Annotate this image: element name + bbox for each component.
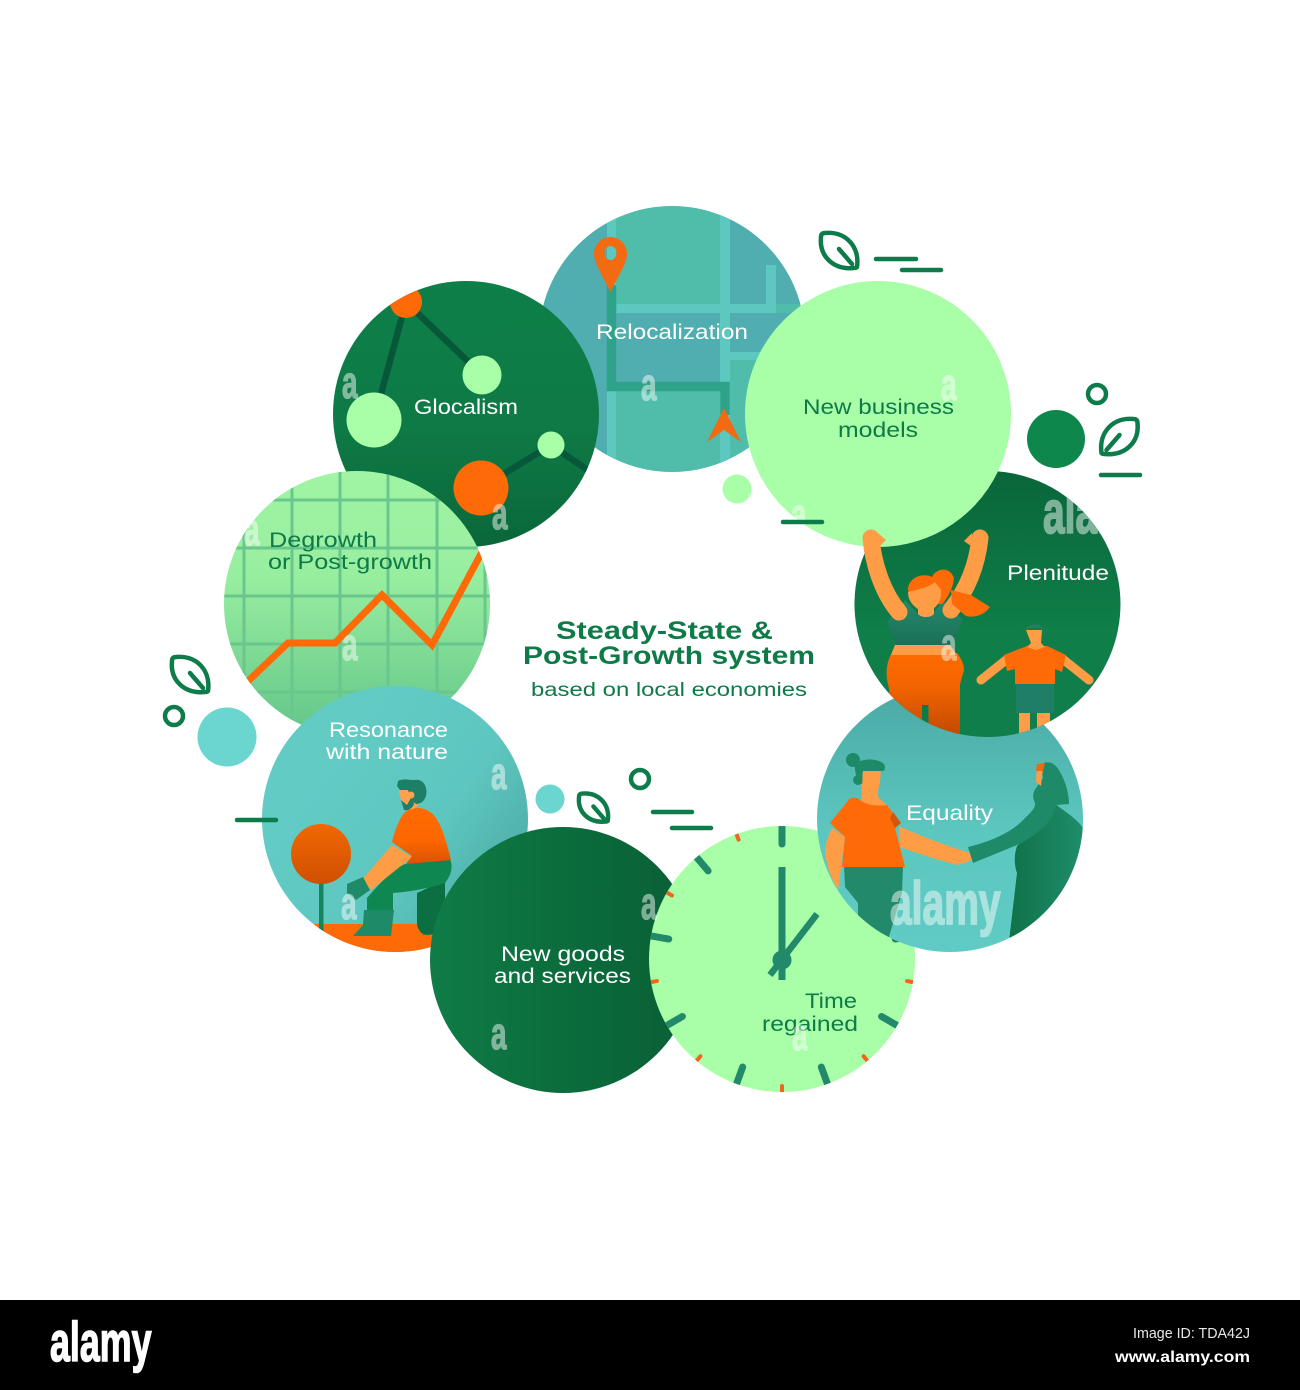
illustration: woman with raised arms [871, 533, 990, 740]
label: New business models: models [838, 419, 918, 442]
watermark letters: a [791, 489, 807, 540]
subtitle: based on local economies [531, 679, 807, 701]
icon: map pin [594, 237, 627, 292]
watermark letters: a [342, 357, 358, 408]
label: Resonance with nature: Resonance [329, 719, 448, 742]
illustration: man planting a tree [291, 779, 452, 952]
panel: Resonance with nature [262, 686, 528, 954]
label: Time regained: Time [805, 990, 857, 1013]
panel: Equality [817, 686, 1083, 952]
footer logo: alamy [50, 1310, 152, 1373]
label: New business models [803, 396, 954, 442]
watermark letters: a [641, 359, 657, 410]
illustration: child with open arms [981, 624, 1089, 745]
watermark letters: a [491, 1008, 507, 1059]
panel: Degrowth or Post-growth [220, 470, 490, 740]
panel: Glocalism [333, 281, 605, 547]
decoration: top right leaf and dashes [821, 233, 941, 270]
decoration: right circles and leaf [1027, 385, 1140, 475]
image id: Image ID: TDA42J [1133, 1325, 1250, 1342]
watermark letters: a [492, 488, 508, 539]
watermark letters [244, 357, 1154, 1060]
line chart on grid [220, 470, 490, 740]
icon: navigation arrow [707, 408, 741, 442]
label: Time regained: regained [762, 1013, 858, 1036]
title: Steady-State & [556, 617, 773, 645]
clock face [651, 826, 913, 1092]
label: Glocalism: Glocalism [414, 396, 518, 419]
watermark letters: a [792, 1009, 808, 1060]
panel: Time regained [649, 826, 915, 1092]
label: Degrowth or Post-growth [268, 529, 432, 574]
decoration: centre top dot and dash [722, 474, 822, 522]
panel: New goods and services [430, 827, 696, 1093]
watermark letters: a [941, 359, 957, 410]
watermark letters: a [244, 504, 260, 555]
label: Degrowth or Post-growth: Degrowth [269, 529, 377, 552]
label: Plenitude: Plenitude [1007, 562, 1109, 585]
watermark letters: a [641, 878, 657, 929]
label: Equality: Equality [906, 802, 994, 825]
decoration: bottom centre dot, leaf, ring and dashes [536, 770, 711, 828]
label: Relocalization: Relocalization [596, 321, 748, 344]
panel: Plenitude [854, 471, 1120, 745]
label: Resonance with nature: with nature [325, 741, 448, 764]
panel: New business models [745, 281, 1011, 547]
title [523, 617, 815, 670]
watermark letters: a [342, 619, 358, 670]
watermark letters: alamy [890, 869, 1001, 937]
label: New business models: New business [803, 396, 954, 419]
network graph [346, 286, 605, 516]
footer bar [0, 1300, 1300, 1390]
label: New goods and services [494, 943, 631, 988]
label: Time regained [762, 990, 858, 1036]
label: Degrowth or Post-growth: or Post-growth [268, 551, 432, 574]
decoration: left leaf and circles [165, 657, 276, 820]
label: New goods and services: New goods [501, 943, 625, 966]
title: Post-Growth system [523, 642, 815, 670]
watermark letters: alamy [1043, 478, 1154, 546]
panel: Relocalization [539, 206, 810, 472]
label: Resonance with nature [325, 719, 448, 764]
website: www.alamy.com [1114, 1349, 1250, 1366]
label: New goods and services: and services [494, 965, 631, 988]
watermark letters: a [341, 878, 357, 929]
watermark letters: a [941, 619, 957, 670]
watermark letters: a [491, 748, 507, 799]
illustration: two women shaking hands [825, 753, 1083, 950]
